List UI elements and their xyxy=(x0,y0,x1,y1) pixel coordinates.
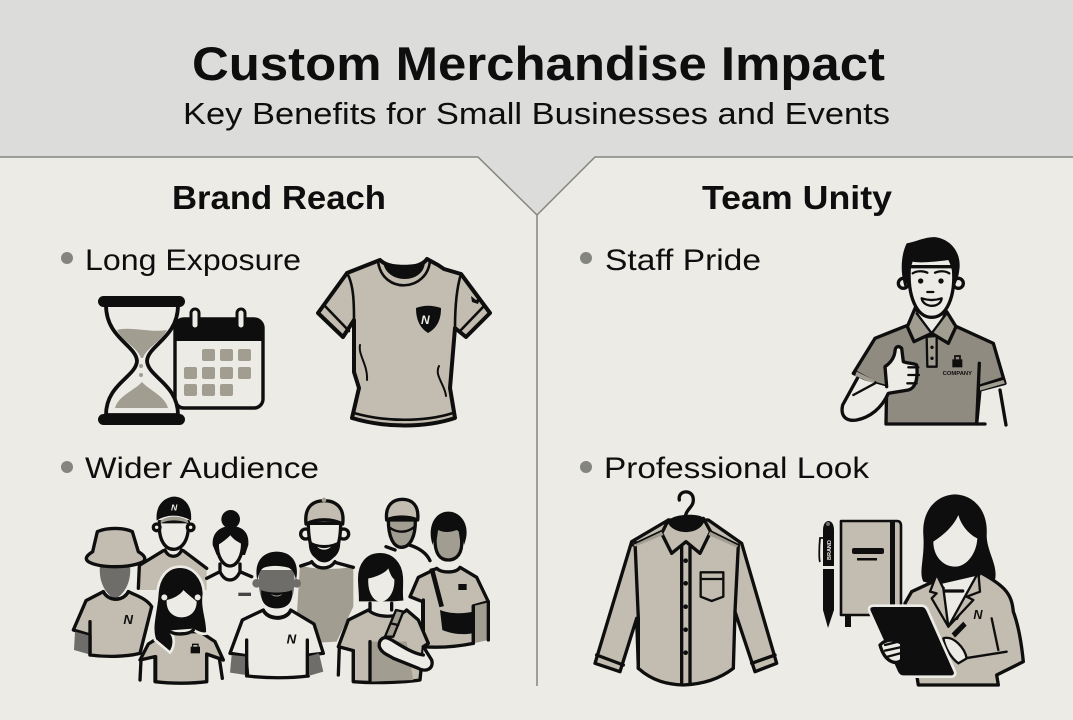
heading: Brand Reach: Brand Reach xyxy=(172,179,386,216)
person: curly hair with crossbody bag xyxy=(410,512,488,647)
icon: branded pen xyxy=(819,521,834,628)
heading: Team Unity: Team Unity xyxy=(702,179,893,216)
title: Custom Merchandise Impact xyxy=(192,37,885,90)
person: cap and mask xyxy=(385,499,430,630)
icon: staff member with thumbs up: COMPANY xyxy=(943,371,972,377)
icon: t-shirt: N xyxy=(421,313,430,327)
icon: woman with tablet xyxy=(869,494,1023,685)
person: bob hair with backpack xyxy=(338,552,432,683)
person: cap and beard xyxy=(295,498,353,644)
icon: branded pen: BRAND xyxy=(827,540,833,560)
icon: shirt on hanger xyxy=(595,492,777,685)
icon: staff member with thumbs up xyxy=(842,237,1006,425)
bullet: Staff Pride: Staff Pride xyxy=(605,244,761,277)
person: hair bun xyxy=(207,510,252,596)
person: bucket hat: N xyxy=(123,612,133,627)
header banner xyxy=(0,0,1073,215)
icon: notebook xyxy=(841,521,901,627)
person: black cap xyxy=(138,497,207,590)
person: long hair xyxy=(140,567,223,683)
person: black cap: N xyxy=(171,503,178,513)
person: bucket hat xyxy=(73,528,152,656)
icon: hourglass xyxy=(98,296,185,425)
person: beard front: N xyxy=(287,631,297,646)
bullet: Long Exposure: Long Exposure xyxy=(85,244,301,277)
illustration: crowd of people xyxy=(73,497,488,683)
bullet: Wider Audience: Wider Audience xyxy=(85,452,319,485)
bullet: Professional Look: Professional Look xyxy=(604,452,870,485)
person: beard front xyxy=(230,552,323,678)
icon: t-shirt xyxy=(318,259,490,426)
subtitle: Key Benefits for Small Businesses and Events xyxy=(183,96,890,131)
icon: woman with tablet: N xyxy=(973,608,983,622)
icon: calendar xyxy=(175,309,263,408)
